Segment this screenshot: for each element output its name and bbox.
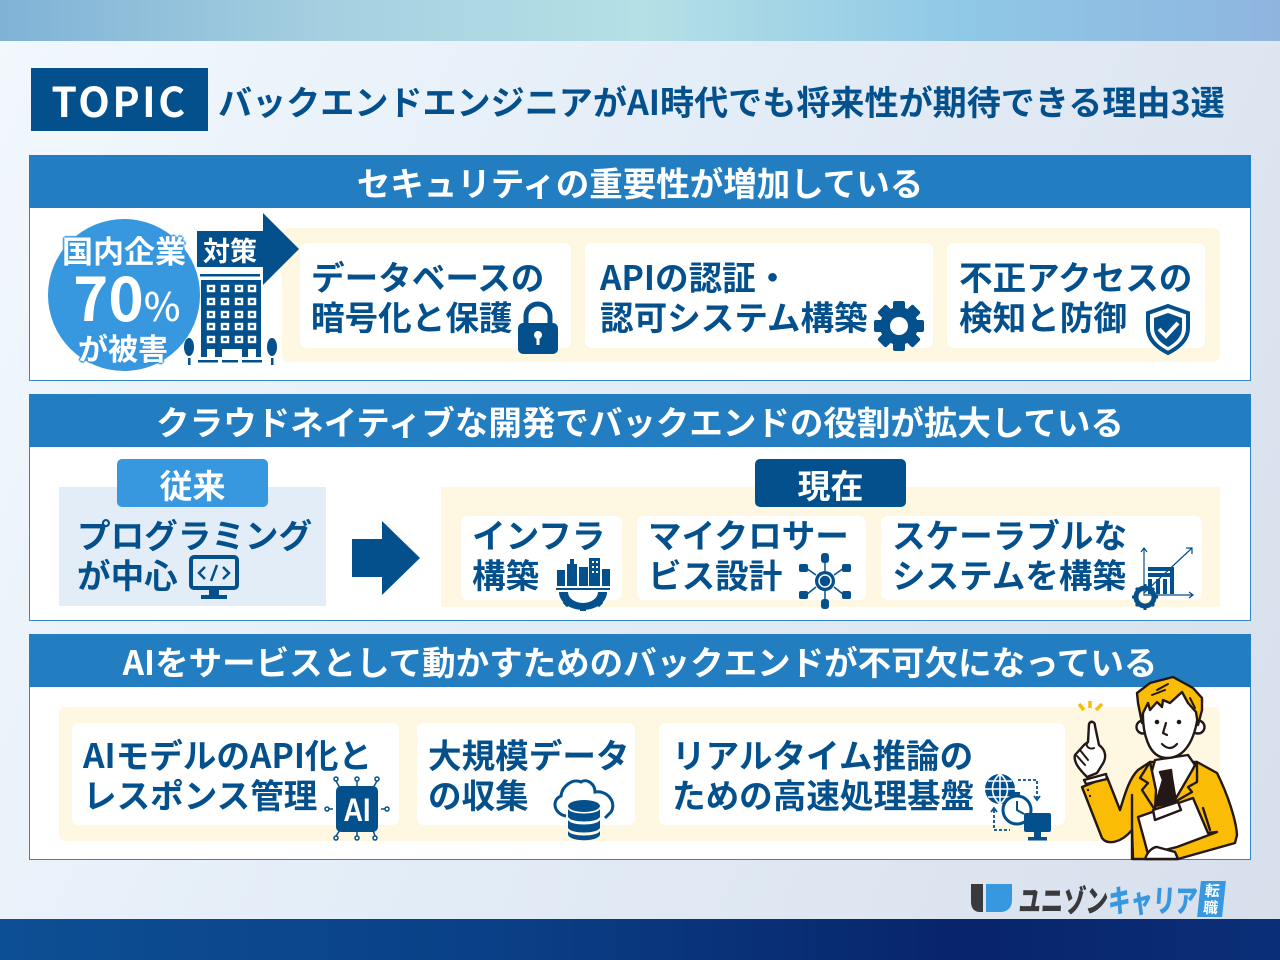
text: microservices: ビス設計 (648, 549, 782, 598)
panel: AI (29, 634, 1251, 860)
text: microservices (648, 509, 849, 598)
text: api (600, 251, 868, 340)
shirt and tie (1148, 755, 1195, 806)
card: data collection (417, 723, 635, 825)
text: detection (959, 251, 1192, 340)
text: database: 暗号化と保護 (311, 291, 512, 340)
text: data collection: の収集 (428, 769, 529, 818)
text: database: データベースの (311, 251, 544, 300)
text: data collection: 大規模データ (428, 729, 629, 778)
icon: shield (1146, 304, 1190, 356)
text: scalable: システムを構築 (892, 549, 1126, 598)
text: conventional: プログラミング (77, 509, 312, 558)
title: バックエンドエンジニアがAI時代でも将来性が期待できる理由3選 (218, 75, 1225, 125)
arrow label: 対策 (203, 230, 257, 269)
text: infrastructure: インフラ (472, 509, 605, 558)
bottom banner (0, 919, 1280, 960)
text: microservices: マイクロサー (648, 509, 849, 558)
text: conventional (77, 509, 312, 598)
stat label bottom: が被害 (78, 325, 168, 369)
card: api (585, 243, 933, 348)
icon: AI chip: AI (344, 792, 370, 828)
panel: cloud native (29, 394, 1251, 621)
label: conventional: 従来 (160, 460, 226, 508)
jacket (1082, 762, 1237, 859)
icon: scale chart with gear (1132, 547, 1194, 610)
text: data collection (428, 729, 629, 818)
icon: globe clock monitor (985, 774, 1051, 840)
text: conventional: が中心 (77, 549, 178, 598)
text: real-time: リアルタイム推論の (672, 729, 973, 778)
text: api: 認可システム構築 (600, 291, 868, 340)
box: conventional (59, 487, 326, 606)
text: detection: 不正アクセスの (959, 251, 1192, 300)
stat label top: 国内企業 (62, 227, 186, 272)
heading: security (29, 155, 1251, 208)
text: infrastructure (472, 509, 605, 598)
text: AI model: AIモデルのAPI化と (83, 729, 372, 778)
logo wordmark: ユニゾンキャリア (1018, 876, 1199, 921)
text: AI model: レスポンス管理 (83, 769, 317, 818)
text: database (311, 251, 544, 340)
icon: cloud database (553, 779, 614, 840)
title badge: TOPIC (51, 69, 188, 129)
heading: cloud native: クラウドネイティブな開発でバックエンドの役割が拡大している (156, 396, 1124, 445)
icon: lock (518, 302, 558, 354)
logo (971, 876, 1226, 921)
icon: code monitor (189, 555, 239, 599)
character: businessman pointing (1073, 676, 1238, 860)
top banner (0, 0, 1280, 41)
lapels (1140, 762, 1156, 810)
logo tag: 転 (1204, 880, 1221, 901)
circle stat: 70% (48, 219, 200, 371)
clipboard (1138, 798, 1217, 854)
head (1136, 720, 1150, 734)
card: infrastructure (461, 516, 622, 600)
label: current: 現在 (798, 460, 864, 508)
card: scalable (881, 516, 1202, 600)
label: current (755, 459, 906, 507)
text: AI model (82, 729, 372, 818)
label: conventional (117, 459, 268, 507)
cream area: current (441, 487, 1220, 607)
logo mark (971, 884, 1012, 912)
card: AI model (72, 723, 399, 825)
card: database (300, 243, 571, 348)
icon: city gear (556, 558, 610, 611)
text: infrastructure: 構築 (472, 549, 539, 598)
hand (1075, 722, 1105, 777)
cream area: AI (59, 707, 1220, 841)
logo tag (1197, 881, 1226, 917)
text: real-time: ための高速処理基盤 (672, 769, 974, 818)
card: real-time (659, 723, 1065, 825)
text: scalable: スケーラブルな (892, 509, 1127, 558)
stat number: 70% (73, 252, 180, 339)
panel: security (29, 155, 1251, 381)
icon: gear (874, 301, 924, 351)
text: scalable (892, 509, 1127, 598)
text: real-time (672, 729, 974, 818)
arrow: conventional to current (352, 521, 420, 595)
heading: AI: AIをサービスとして動かすためのバックエンドが不可欠になっている (123, 636, 1157, 685)
heading: security: セキュリティの重要性が増加している (357, 157, 923, 206)
card: detection (947, 243, 1205, 348)
icon: AI chip (324, 776, 390, 841)
logo tag: 職 (1202, 897, 1219, 918)
cream area: security (282, 228, 1220, 362)
text: api: APIの認証・ (600, 251, 789, 300)
card: microservices (637, 516, 866, 600)
text: detection: 検知と防御 (959, 291, 1127, 340)
icon: microservice nodes (799, 553, 851, 609)
